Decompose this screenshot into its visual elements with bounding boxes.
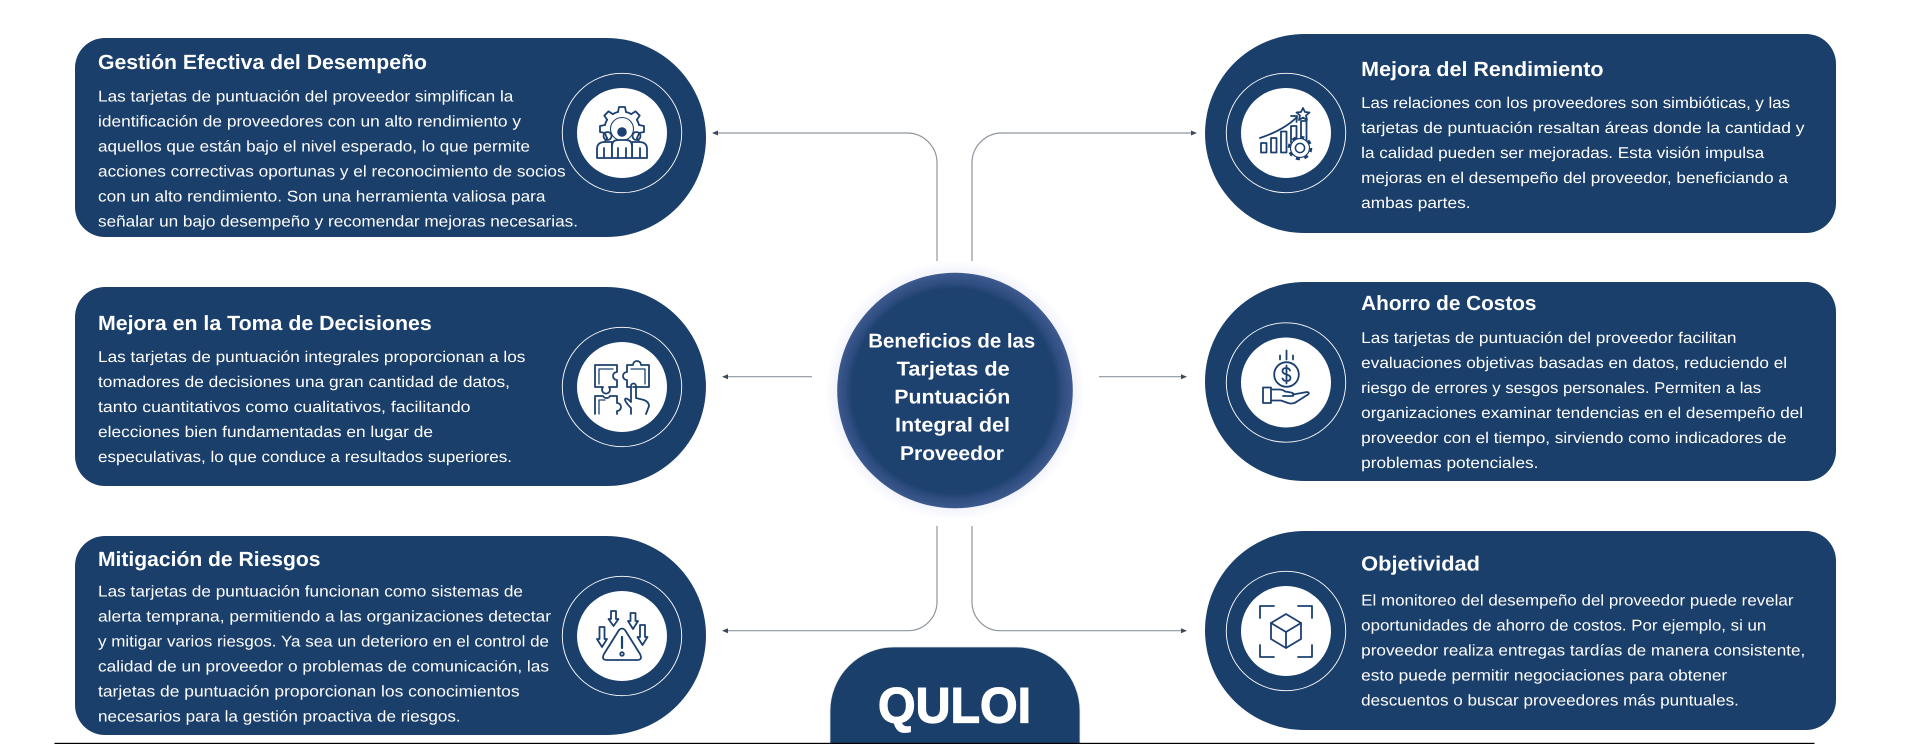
panel: Objetividad xyxy=(1205,531,1836,730)
logo tab: QULOI xyxy=(830,647,1080,744)
heading: Ahorro de Costos xyxy=(1361,292,1536,315)
body text: acciones correctivas oportunas y el reconocimiento de socios xyxy=(98,163,566,180)
icon: growth chart and gear xyxy=(1226,73,1346,193)
body text: riesgo de errores y sesgos personales. Permiten a las xyxy=(1361,380,1761,397)
body text: descuentos o buscar proveedores más puntuales. xyxy=(1361,692,1739,709)
body text: evaluaciones objetivas basadas en datos, reduciendo el xyxy=(1361,355,1787,372)
icon: cube in frame xyxy=(1226,571,1346,691)
body text xyxy=(98,349,526,466)
central title xyxy=(868,330,1035,465)
panel: Mejora en la Toma de Decisiones xyxy=(75,287,706,486)
body text: aquellos que están bajo el nivel esperado, lo que permite xyxy=(98,138,530,155)
heading: Gestión Efectiva del Desempeño xyxy=(98,51,427,74)
body text: tomadores de decisiones una gran cantidad de datos, xyxy=(98,374,510,391)
heading: Mejora en la Toma de Decisiones xyxy=(98,312,432,335)
heading: Objetividad xyxy=(1361,553,1480,576)
panel: Mitigación de Riesgos xyxy=(75,536,706,735)
body text xyxy=(1361,330,1803,472)
body text: proveedor realiza entregas tardías de manera consistente, xyxy=(1361,642,1805,659)
connector: middle left xyxy=(722,374,812,379)
body text xyxy=(98,584,551,726)
body text: organizaciones examinar tendencias en el desempeño del xyxy=(1361,405,1803,422)
body text: la calidad pueden ser mejoradas. Esta visión impulsa xyxy=(1361,145,1764,162)
icon: warning and arrows xyxy=(562,576,682,696)
body text: señalar un bajo desempeño y recomendar mejoras necesarias. xyxy=(98,213,578,230)
heading: Mitigación de Riesgos xyxy=(98,548,320,571)
body text: identificación de proveedores con un alto rendimiento y xyxy=(98,113,521,130)
connector: top right xyxy=(972,130,1197,261)
central circle xyxy=(825,260,1085,520)
body text: Las tarjetas de puntuación del proveedor simplifican la xyxy=(98,88,514,105)
body text: esto puede permitir negociaciones para obtener xyxy=(1361,667,1727,684)
body text: con un alto rendimiento. Son una herramienta valiosa para xyxy=(98,188,546,205)
icon: puzzle and hand xyxy=(562,327,682,447)
body text: tarjetas de puntuación proporcionan los conocimientos xyxy=(98,684,520,701)
heading: Mejora del Rendimiento xyxy=(1361,58,1604,81)
logo wordmark: QULOI xyxy=(878,678,1031,734)
central title: Proveedor xyxy=(900,443,1004,465)
body text xyxy=(1361,95,1805,212)
body text: especulativas, lo que conduce a resultados superiores. xyxy=(98,449,512,466)
body text: Las tarjetas de puntuación del proveedor facilitan xyxy=(1361,330,1736,347)
body text: Las tarjetas de puntuación funcionan como sistemas de xyxy=(98,584,523,601)
body text: oportunidades de ahorro de costos. Por ejemplo, si un xyxy=(1361,617,1766,634)
connector: bottom right xyxy=(972,526,1187,633)
body text: tanto cuantitativos como cualitativos, facilitando xyxy=(98,399,471,416)
body text: elecciones bien fundamentadas en lugar de xyxy=(98,424,433,441)
panel: Mejora del Rendimiento xyxy=(1205,34,1836,233)
body text: Las relaciones con los proveedores son simbióticas, y las xyxy=(1361,95,1790,112)
body text: mejoras en el desempeño del proveedor, beneficiando a xyxy=(1361,170,1788,187)
body text: proveedor con el tiempo, sirviendo como indicadores de xyxy=(1361,430,1786,447)
panel: Ahorro de Costos xyxy=(1205,282,1836,481)
body text: alerta temprana, permitiendo a las organizaciones detectar xyxy=(98,609,551,626)
icon: gear and team xyxy=(562,73,682,193)
body text: problemas potenciales. xyxy=(1361,455,1538,472)
body text xyxy=(98,88,578,230)
body text: calidad de un proveedor o problemas de comunicación, las xyxy=(98,659,549,676)
central title: Tarjetas de xyxy=(897,358,1010,380)
connector: middle right xyxy=(1099,374,1187,379)
body text: ambas partes. xyxy=(1361,195,1470,212)
body text: El monitoreo del desempeño del proveedor puede revelar xyxy=(1361,592,1793,609)
body text: necesarios para la gestión proactiva de riesgos. xyxy=(98,709,461,726)
connector: bottom left xyxy=(722,526,937,633)
panel: Gestión Efectiva del Desempeño xyxy=(75,38,706,237)
body text xyxy=(1361,592,1805,709)
bottom rule xyxy=(54,743,1814,744)
icon: coin over hand xyxy=(1226,323,1346,442)
central title: Beneficios de las xyxy=(868,330,1035,352)
body text: Las tarjetas de puntuación integrales proporcionan a los xyxy=(98,349,526,366)
central title: Puntuación xyxy=(894,386,1010,408)
body text: y mitigar varios riesgos. Ya sea un deterioro en el control de xyxy=(98,634,549,651)
central title: Integral del xyxy=(895,414,1010,436)
body text: tarjetas de puntuación resaltan áreas donde la cantidad y xyxy=(1361,120,1805,137)
connector: top left xyxy=(712,130,937,261)
